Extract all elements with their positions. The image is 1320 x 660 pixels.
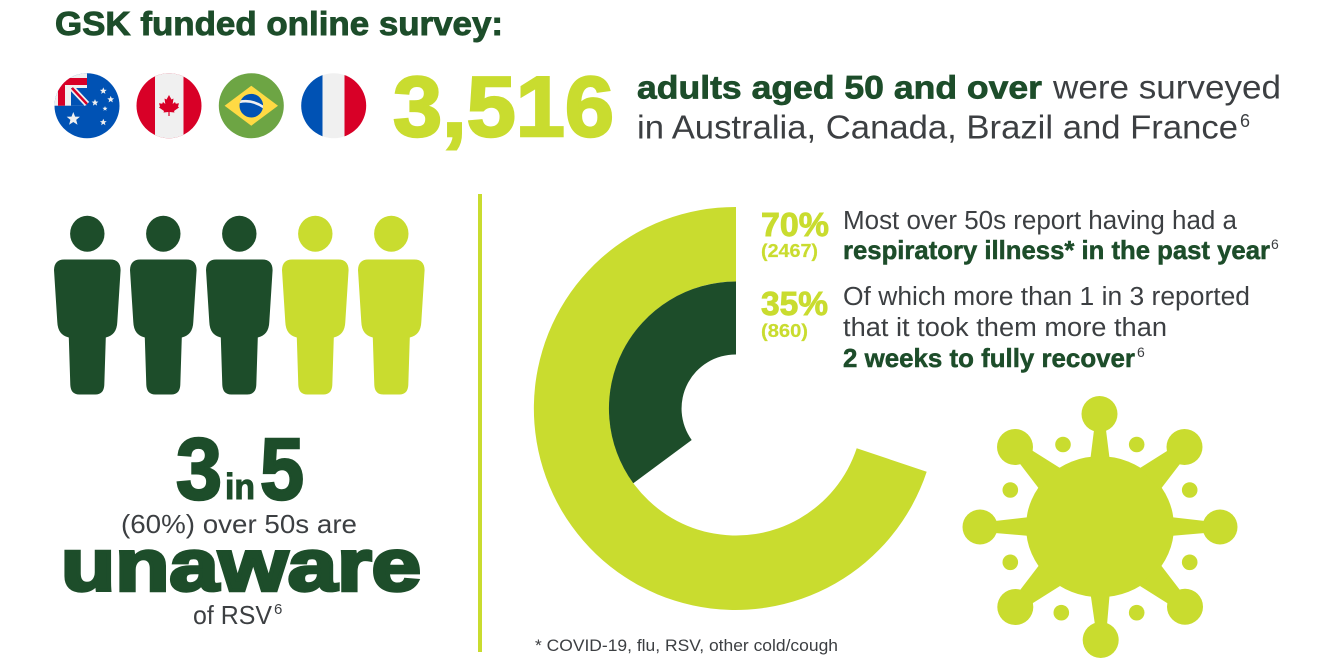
survey description: in Australia, Canada, Brazil and France bbox=[637, 110, 1238, 146]
statistic: 3 in 5: in bbox=[225, 466, 255, 507]
icon: Australia flag bbox=[54, 73, 120, 139]
person 1 dark bbox=[54, 216, 121, 394]
text: recovery: 6 bbox=[1137, 344, 1145, 360]
statistic: 3 in 5: 3 bbox=[176, 421, 222, 518]
pictogram: 3 of 5 people bbox=[54, 216, 425, 394]
footnote: * COVID-19, flu, RSV, other cold/cough bbox=[535, 637, 838, 655]
word: unaware: unaware bbox=[61, 526, 421, 606]
text: respiratory illness bbox=[843, 207, 1279, 265]
stat: 35%: 35% bbox=[761, 285, 828, 322]
person 4 lime bbox=[282, 216, 349, 394]
person 3 dark bbox=[206, 216, 273, 394]
icon: France flag bbox=[300, 73, 368, 139]
title: GSK funded online survey: bbox=[55, 5, 503, 42]
text: recovery bbox=[843, 283, 1250, 373]
text: recovery: 2 weeks to fully recover bbox=[843, 343, 1135, 373]
text: respiratory illness: respiratory illness* in the past year bbox=[843, 235, 1270, 265]
text: respiratory illness: 6 bbox=[1271, 236, 1279, 252]
person 2 dark bbox=[130, 216, 197, 394]
ring: 35 percent bbox=[609, 281, 736, 483]
text: recovery: Of which more than 1 in 3 reported bbox=[843, 283, 1250, 311]
text: 60% over 50s are: (60%) over 50s are bbox=[121, 509, 357, 539]
statistic: 3 in 5 bbox=[176, 421, 304, 518]
text: of RSV: 6 bbox=[274, 601, 282, 618]
text: recovery: that it took them more than bbox=[843, 314, 1167, 342]
stat: 70% bbox=[761, 206, 829, 261]
survey description: adults aged 50 and over bbox=[637, 70, 1042, 106]
divider bbox=[478, 194, 482, 652]
stat: 70%: 70% bbox=[761, 206, 829, 243]
icon: Brazil flag bbox=[219, 73, 284, 138]
big number: 3,516: 3,516 bbox=[393, 60, 614, 155]
text: of RSV: of RSV bbox=[193, 600, 273, 630]
survey description bbox=[637, 68, 1281, 146]
donut chart bbox=[534, 207, 927, 610]
survey description: were surveyed bbox=[1052, 68, 1281, 106]
icon: Canada flag bbox=[136, 73, 202, 139]
statistic: 3 in 5: 5 bbox=[260, 421, 304, 518]
stat: 70%: (2467) bbox=[761, 241, 818, 261]
ring: 70 percent bbox=[534, 207, 927, 610]
stat: 35%: (860) bbox=[761, 321, 808, 341]
survey description: 6 bbox=[1240, 111, 1250, 131]
flags row bbox=[54, 73, 368, 139]
text: respiratory illness: Most over 50s report having had a bbox=[843, 207, 1238, 235]
icon: virus bbox=[962, 396, 1238, 658]
stat: 35% bbox=[761, 285, 828, 341]
person 5 lime bbox=[358, 216, 425, 394]
